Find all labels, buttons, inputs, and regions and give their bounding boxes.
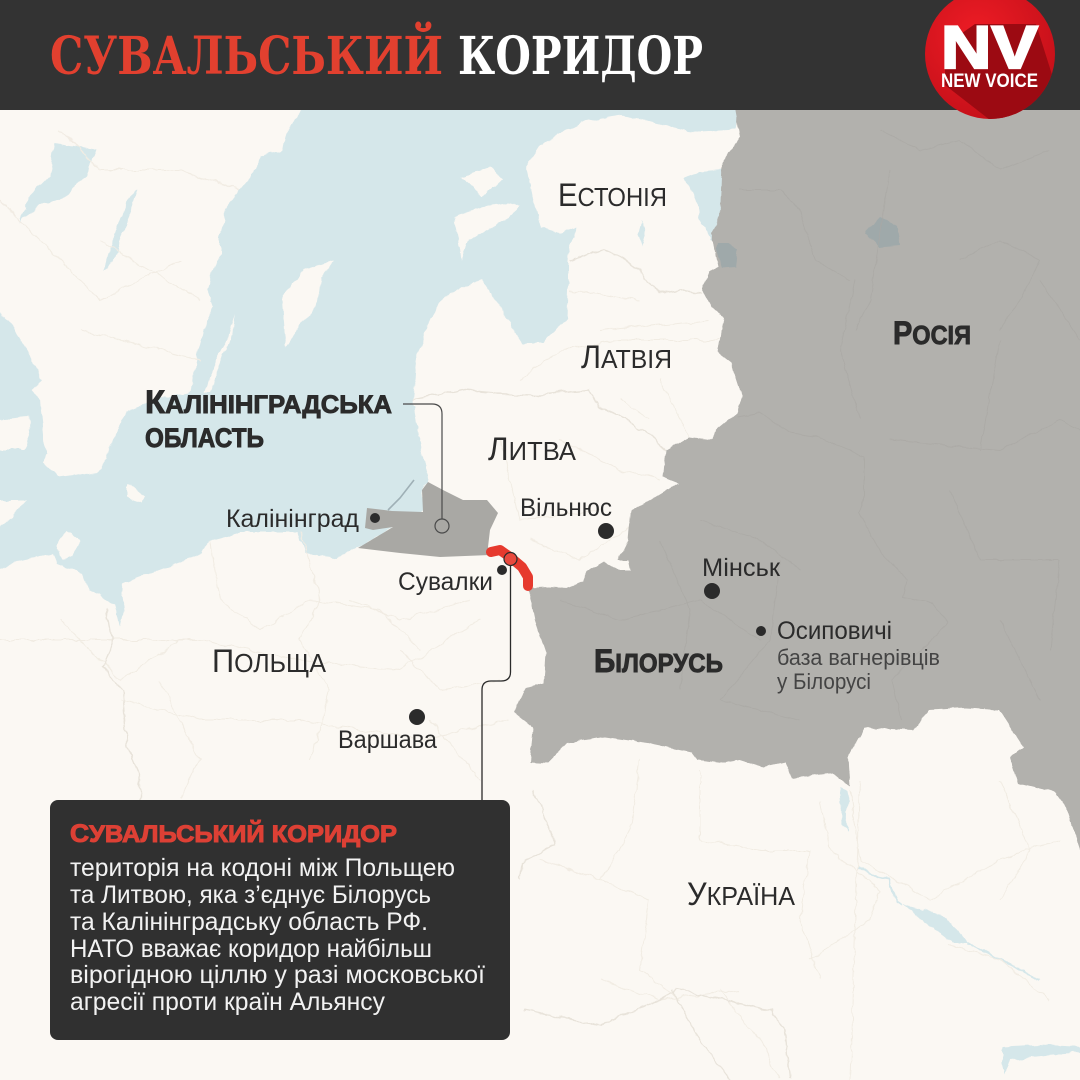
callout heading: СУВАЛЬСЬКИЙ КОРИДОР [70, 820, 397, 848]
country labels [212, 177, 971, 912]
callout: Suwalki corridor [50, 800, 510, 1040]
callout text: вірогідною ціллю у разі московської [70, 961, 485, 989]
city labels: Вільнюс [520, 494, 612, 522]
title: КОРИДОР [458, 26, 703, 87]
title: СУВАЛЬСЬКИЙ [50, 21, 443, 87]
Poland: ПОЛЬЩА [212, 643, 327, 679]
note: Wagner base: у Білорусі [777, 669, 871, 694]
callout text: та Литвою, яка з’єднує Білорусь [70, 881, 431, 909]
leader line: Kaliningrad oblast [403, 404, 449, 533]
callout text [70, 854, 485, 1016]
Belarus: БІЛОРУСЬ [594, 643, 723, 679]
Russia: РОСІЯ [893, 315, 971, 351]
label: Kaliningrad oblast [145, 384, 392, 453]
callout text: територія на кодоні між Польщею [70, 854, 455, 882]
logo letters: NV [941, 14, 1038, 81]
city labels: Сувалки [398, 568, 493, 596]
Curonian spit [388, 480, 414, 510]
Estonia: ЕСТОНІЯ [558, 177, 667, 213]
callout text: агресії проти країн Альянсу [70, 988, 385, 1016]
grey region: Russia and Belarus [513, 100, 1080, 880]
leader line: Suwalki [482, 552, 517, 800]
city labels [226, 494, 892, 754]
note: Wagner base [777, 645, 940, 694]
city labels: Варшава [338, 726, 437, 754]
logo shadow [945, 24, 1052, 119]
Suwalki corridor red line [491, 550, 528, 586]
city markers [370, 513, 766, 725]
lakes in Russia [716, 217, 900, 268]
Ukraine: УКРАЇНА [687, 876, 796, 912]
land: Denmark and German islands [0, 417, 145, 560]
land: Sweden [0, 100, 306, 477]
callout panel [50, 800, 510, 1040]
city labels: Калінінград [226, 505, 359, 533]
title [50, 21, 703, 87]
logo tagline: NEW VOICE [941, 71, 1038, 92]
callout text: НАТО вважає коридор найбільш [70, 935, 432, 963]
land: Gotland, Oland, Estonian islands [205, 167, 520, 392]
Kaliningrad oblast [358, 480, 498, 557]
label: Kaliningrad oblast: КАЛІНІНГРАДСЬКА [145, 384, 392, 420]
header bar [0, 0, 1080, 110]
callout text: та Калінінградську область РФ. [70, 908, 428, 936]
internal borders [560, 130, 1080, 720]
city labels: Осиповичі [777, 617, 892, 645]
logo: NV New Voice [925, 0, 1060, 125]
city labels: Мінськ [702, 554, 781, 582]
Latvia: ЛАТВІЯ [581, 339, 672, 375]
note: Wagner base: база вагнерівців [777, 645, 940, 670]
Lithuania: ЛИТВА [488, 431, 577, 467]
label: Kaliningrad oblast: ОБЛАСТЬ [145, 423, 264, 453]
